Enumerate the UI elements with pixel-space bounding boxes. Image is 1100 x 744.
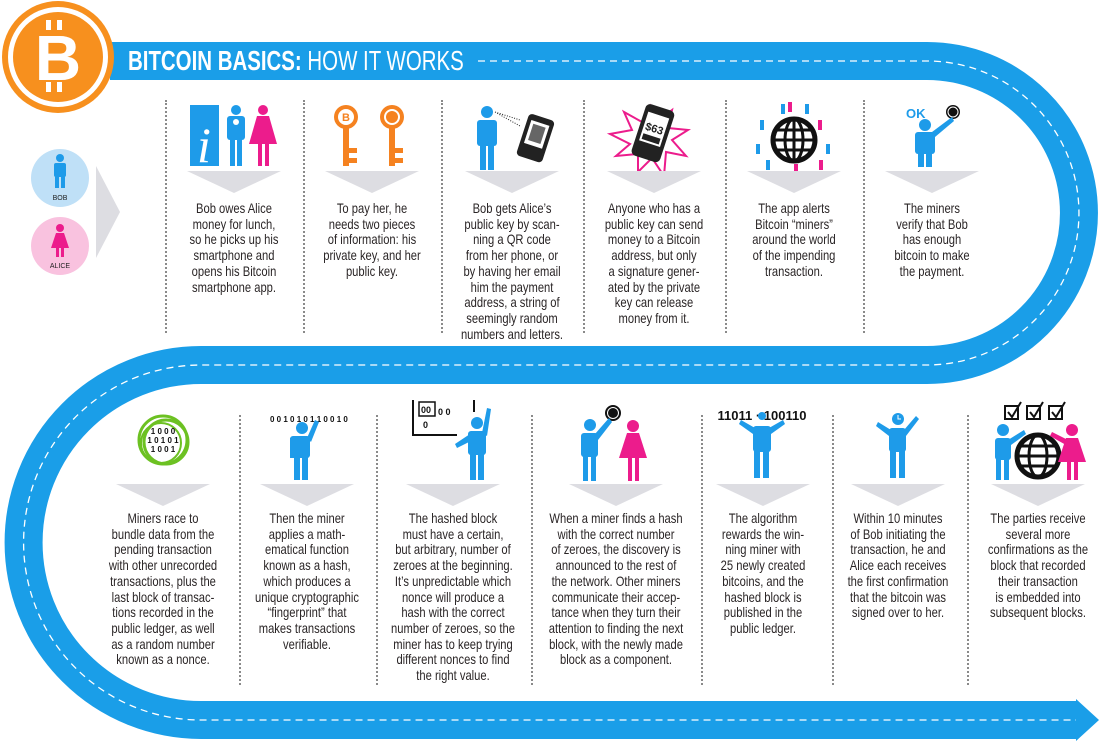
panel: step 12 [848, 413, 948, 620]
panel: step 7: transactions, plus the [110, 573, 216, 589]
icon: miner with hash digits [270, 415, 348, 480]
panel: step 13: The parties receive [990, 510, 1086, 526]
logo: bitcoin [2, 1, 114, 113]
panel: step 8: unique cryptographic [255, 589, 359, 605]
panel: step 7: known as a nonce. [116, 651, 210, 667]
panel: step 1: so he picks up his [189, 231, 279, 247]
icon: miner rewarded binary [718, 408, 806, 478]
title: BITCOIN BASICS: HOW IT WORKS [128, 45, 464, 76]
panel: step 9: but arbitrary, number of [395, 541, 511, 557]
panel: step 5: around the world [752, 231, 836, 247]
panel: step 3: numbers and letters. [461, 326, 563, 342]
panel: step 11: 25 newly created [721, 557, 805, 573]
panel: step 12: the first confirmation [848, 573, 948, 589]
panel: step 2 [323, 105, 421, 279]
panel: step 9: nonce will produce a [402, 589, 504, 605]
icon: miner at board: 0 [423, 420, 428, 430]
icon: phone with burst: $63 [644, 121, 665, 138]
panel: step 10: tance when they turn their [552, 604, 680, 620]
panel: step 9: hash with the correct [401, 604, 505, 620]
panel: step 9: It’s unpredictable which [395, 573, 511, 589]
panel: step 13: subsequent blocks. [990, 604, 1086, 620]
panel: step 3: address, a string of [464, 294, 560, 310]
panel: step 8 [255, 415, 359, 652]
panel: step 10: with the correct number [557, 526, 675, 542]
panel: step 11: published in the [724, 604, 802, 620]
panel: step 7: with other unrecorded [109, 557, 217, 573]
icon: miner at board [412, 400, 491, 480]
panel: step 13 [988, 402, 1088, 620]
panel: step 9: must have a certain, [403, 526, 503, 542]
panel: step 6: the payment. [900, 263, 964, 279]
icon: Bob scanning QR phone [477, 106, 554, 170]
panel: step 11: rewards the win- [722, 526, 804, 542]
panel: step 4: money from it. [619, 310, 689, 326]
icon: figure with clock [876, 413, 919, 478]
icon: globe with miners [756, 102, 830, 171]
panel: step 4: a signature gener- [609, 263, 699, 279]
icon: checks, globe and parties [995, 402, 1086, 480]
panel: step 7: last block of transac- [112, 589, 214, 605]
icon: miner with hash digits: 0 0 1 0 1 0 1 1 0 0 1 0 [270, 415, 348, 424]
panel: step 3 [461, 106, 563, 342]
panel: step 7: bundle data from the [112, 526, 214, 542]
panel: step 8: “fingerprint” that [267, 604, 347, 620]
panel: step 4: public key can send [605, 216, 703, 232]
character: Bob: BOB [53, 195, 68, 202]
icon: miner hands coin to Alice [581, 405, 647, 481]
character: Bob [31, 149, 89, 207]
panel: step 11: bitcoins, and the [722, 573, 804, 589]
panel: step 3: seemingly random [466, 310, 558, 326]
panel: step 9: The hashed block [409, 510, 497, 526]
panel: step 5 [748, 102, 840, 279]
panel: step 6: verify that Bob [896, 216, 968, 232]
icon: green data circles: 1 0 0 0 [151, 427, 176, 436]
icon: keys [334, 105, 404, 166]
panel: step 5: The app alerts [758, 200, 830, 216]
panel: step 12: of Bob initiating the [850, 526, 946, 542]
panel: step 11: public ledger. [730, 620, 796, 636]
panel: step 6: The miners [904, 200, 960, 216]
arrow: grey start [96, 166, 120, 258]
panel: step 8: which produces a [263, 573, 351, 589]
panel: step 13: their transaction [998, 573, 1078, 589]
panel: step 3: from her phone, or [466, 247, 558, 263]
logo: bitcoin: B [35, 22, 81, 94]
panel: step 1 [188, 105, 280, 295]
icon: miner at board: 00 [421, 405, 431, 415]
panel: step 13: is embedded into [995, 589, 1081, 605]
panel: step 3: Bob gets Alice’s [473, 200, 551, 216]
panel: step 3: public key by scan- [464, 216, 560, 232]
panel: step 6 [886, 105, 978, 279]
panel: step 7: tions recorded in the [112, 604, 214, 620]
panel: step 10: the network. Other miners [552, 573, 680, 589]
panel: step 8: verifiable. [283, 636, 331, 652]
panel: step 9: zeroes at the beginning. [393, 557, 513, 573]
panel: step 8: makes transactions [259, 620, 355, 636]
panel: step 13: several more [1006, 526, 1070, 542]
panel: step 1: opens his Bitcoin [192, 263, 276, 279]
panel: step 2: To pay her, he [337, 200, 407, 216]
panel: step 7 [108, 414, 217, 667]
panel: step 10: announced to the rest of [556, 557, 676, 573]
panel: step 12: that the bitcoin was [850, 589, 946, 605]
icon: green data circles: 1 0 1 0 1 [147, 436, 179, 445]
panel: step 2: needs two pieces [329, 216, 415, 232]
panel: step 11: ning miner with [725, 541, 801, 557]
panel: step 3: him the payment [471, 279, 553, 295]
panel: step 4: address, but only [611, 247, 697, 263]
panel: step 7: Miners race to [128, 510, 198, 526]
icon: phone with burst [607, 104, 691, 171]
icon: green data circles: 1 0 0 1 [151, 445, 176, 454]
panel: step 8: known as a hash, [263, 557, 351, 573]
panel: step 4: key can release [615, 294, 693, 310]
icon: miner OK coin: OK [906, 106, 926, 121]
panel: step 6: bitcoin to make [894, 247, 970, 263]
panel: step 10 [549, 405, 684, 667]
panel: step 5: transaction. [765, 263, 823, 279]
character: Alice: ALICE [50, 263, 70, 270]
panel: step 2: of information: his [328, 231, 416, 247]
panel: step 9: the right value. [416, 667, 490, 683]
dividers bottom [239, 415, 241, 685]
panel: step 11: The algorithm [729, 510, 797, 526]
panel: step 11 [716, 408, 810, 636]
panel: step 3: by having her email [463, 263, 561, 279]
panel: step 6: has enough [903, 231, 961, 247]
panel: step 12: Within 10 minutes [853, 510, 943, 526]
panel: step 1: money for lunch, [193, 216, 275, 232]
panel: step 7: public ledger, as well [111, 620, 215, 636]
panel: step 10: When a miner finds a hash [549, 510, 683, 526]
panel: step 12: transaction, he and [850, 541, 946, 557]
panel: step 9: number of zeroes, so the [391, 620, 515, 636]
character: Alice [31, 217, 89, 275]
panel: step 3: ning a QR code [473, 231, 551, 247]
panel: step 8: applies a math- [269, 526, 345, 542]
panel: step 4 [605, 104, 703, 326]
panel: step 8: ematical function [265, 541, 349, 557]
panel: step 4: ated by the private [608, 279, 700, 295]
icon: miner at board: 0 0 [438, 407, 451, 417]
panel: step 9: miner has to keep trying [393, 636, 513, 652]
panel: step 13: confirmations as the [988, 541, 1088, 557]
panel: step 11: hashed block is [724, 589, 802, 605]
panel: step 8: Then the miner [269, 510, 345, 526]
panel: step 12: Alice each receives [850, 557, 946, 573]
panel: step 9 [391, 400, 515, 683]
panel: step 5: Bitcoin “miners” [755, 216, 833, 232]
panel: step 9: different nonces to find [396, 651, 510, 667]
panel: step 7: pending transaction [114, 541, 212, 557]
icon: miner rewarded binary: 11011 · 100110 [718, 408, 806, 423]
panel: step 5: of the impending [753, 247, 835, 263]
icon: green data circles [138, 414, 190, 466]
panel: step 10: block, with the newly made [549, 636, 683, 652]
panel: step 12: signed over to her. [852, 604, 944, 620]
panel: step 10: communicate their accep- [552, 589, 680, 605]
icon: keys: B [342, 112, 350, 124]
panel: step 4: Anyone who has a [608, 200, 700, 216]
panel: step 2: public key. [346, 263, 398, 279]
dividers top [165, 100, 167, 333]
icon: info, Bob and Alice: i [197, 117, 211, 172]
panel: step 4: money to a Bitcoin [608, 231, 700, 247]
panel: step 7: as a random number [111, 636, 215, 652]
panel: step 1: smartphone app. [192, 279, 276, 295]
panel: step 10: attention to finding the next [549, 620, 683, 636]
icon: info, Bob and Alice [190, 105, 277, 172]
icon: miner OK coin [906, 105, 960, 167]
panel: step 10: of zeroes, the discovery is [551, 541, 681, 557]
panel: step 1: smartphone and [194, 247, 274, 263]
panel: step 13: block that recorded [990, 557, 1086, 573]
panel: step 1: Bob owes Alice [196, 200, 272, 216]
panel: step 2: private key, and her [323, 247, 421, 263]
panel: step 10: block as a component. [560, 651, 672, 667]
